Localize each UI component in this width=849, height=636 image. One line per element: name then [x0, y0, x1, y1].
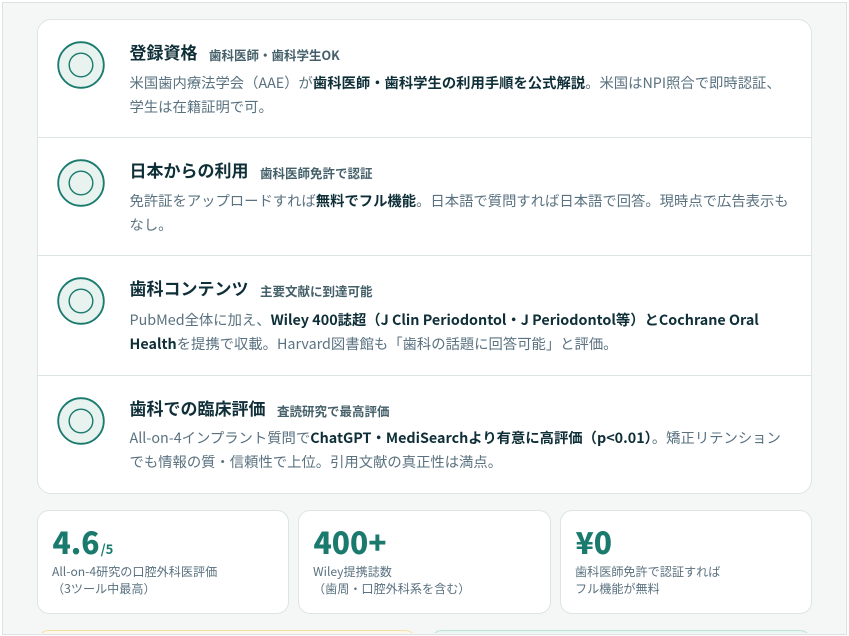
label: （歯周・口腔外科系を含む） — [313, 580, 470, 597]
text block: でも情報の質・信頼性で上位。引用文献の真正性は満点。 — [130, 451, 502, 472]
label: 歯科医師免許で認証すれば — [575, 563, 720, 580]
row: dental content — [57, 275, 759, 354]
label — [52, 563, 217, 597]
icon: circle target — [57, 159, 105, 207]
icon: circle target — [57, 397, 105, 445]
stat card: price — [560, 510, 812, 614]
row: clinical evaluation — [57, 395, 781, 472]
number: 4.6/5 — [52, 519, 113, 563]
text block — [130, 72, 781, 117]
label: （3ツール中最高） — [52, 580, 156, 597]
label: フル機能が無料 — [575, 580, 660, 597]
text block: Healthを提携で収載。Harvard図書館も「歯科の話題に回答可能」と評価。 — [130, 333, 618, 354]
text block: PubMed全体に加え、Wiley 400誌超（J Clin Periodontol・J Periodontol等）とCochrane Oral — [130, 309, 759, 330]
number: ¥0 — [576, 519, 612, 563]
number: 400+ — [314, 519, 387, 563]
label — [575, 563, 720, 597]
text block — [130, 309, 759, 354]
text block: なし。 — [130, 214, 172, 235]
heading: 登録資格 歯科医師・歯科学生OK — [130, 39, 340, 64]
heading: 日本からの利用 歯科医師免許で認証 — [130, 157, 373, 182]
text block: 米国歯内療法学会（AAE）が歯科医師・歯科学生の利用手順を公式解説。米国はNPI照合で即時認証、 — [130, 72, 781, 93]
text block — [130, 190, 789, 235]
label: All-on-4研究の口腔外科医評価 — [52, 563, 217, 580]
text block — [130, 427, 781, 472]
icon: circle target — [57, 277, 105, 325]
text block: All-on-4インプラント質問でChatGPT・MediSearchより有意に高評価（p<0.01）。矯正リテンション — [130, 427, 781, 448]
heading: 歯科での臨床評価 査読研究で最高評価 — [130, 395, 390, 420]
heading: 歯科コンテンツ 主要文献に到達可能 — [130, 275, 373, 300]
stat card: journals — [298, 510, 551, 614]
panel: clipped notice cards — [41, 630, 808, 633]
panel: details list — [37, 19, 812, 494]
text block: 学生は在籍証明で可。 — [130, 96, 273, 117]
stat card: rating — [37, 510, 289, 614]
label: Wiley提携誌数 — [313, 563, 392, 580]
label — [313, 563, 470, 597]
text block: 免許証をアップロードすれば無料でフル機能。日本語で質問すれば日本語で回答。現時点で広告表示も — [130, 190, 789, 211]
row: use from Japan — [57, 157, 789, 235]
icon: circle target — [57, 41, 105, 89]
row: registration eligibility — [57, 39, 781, 117]
